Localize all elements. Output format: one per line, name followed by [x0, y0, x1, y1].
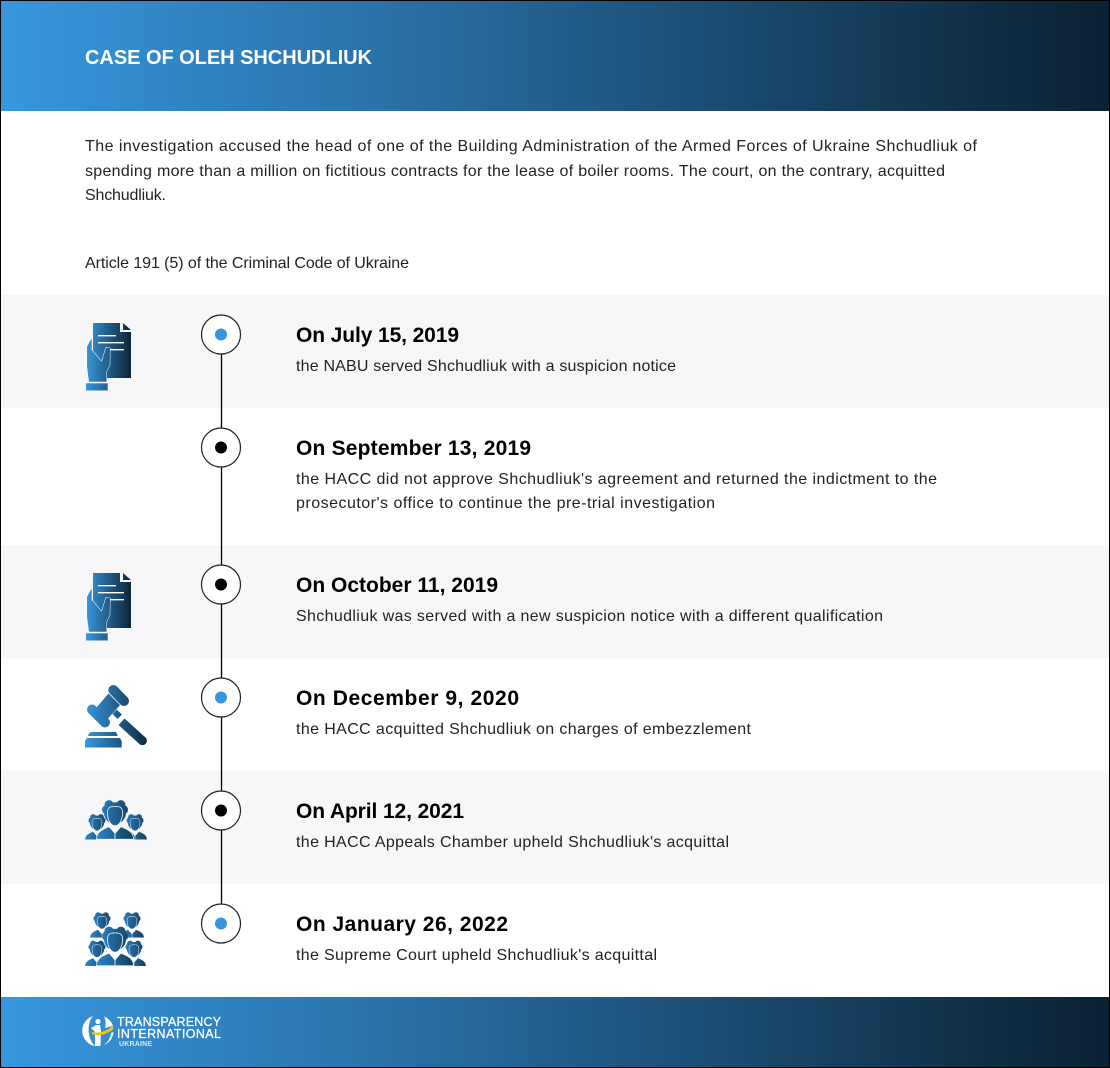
logo: Transparency International Ukraine: INTERNATIONAL: [117, 1027, 221, 1041]
event: December 9, 2020: the HACC acquitted Shchudliuk on charges of embezzlement: [296, 721, 752, 738]
timeline marker: July 15, 2019: [202, 315, 240, 354]
event: September 13, 2019: prosecutor's office to continue the pre-trial investigation: [296, 495, 715, 512]
event: October 11, 2019: On October 11, 2019: [296, 574, 498, 597]
row background bands: [0, 295, 1110, 884]
event: July 15, 2019: [296, 324, 676, 375]
timeline marker: April 12, 2021: [202, 791, 240, 830]
timeline marker: December 9, 2020: [202, 678, 240, 717]
icon: panel of three judges: [85, 800, 147, 840]
logo: Transparency International Ukraine: [82, 1015, 222, 1048]
event: December 9, 2020: On December 9, 2020: [296, 687, 519, 710]
timeline marker: September 13, 2019: [202, 428, 240, 467]
timeline marker: January 26, 2022: [202, 904, 240, 943]
footer banner: [0, 997, 1110, 1068]
event: April 12, 2021: On April 12, 2021: [296, 800, 464, 823]
event: January 26, 2022: On January 26, 2022: [296, 913, 508, 936]
intro paragraph: Shchudliuk.: [85, 187, 166, 204]
title: CASE OF OLEH SHCHUDLIUK: [85, 47, 373, 69]
event: September 13, 2019: the HACC did not approve Shchudliuk's agreement and returned the indictment to the: [296, 471, 937, 488]
intro paragraph: [85, 138, 978, 204]
event: October 11, 2019: Shchudliuk was served with a new suspicion notice with a different qualification: [296, 608, 883, 625]
header banner: [0, 0, 1110, 111]
event: April 12, 2021: the HACC Appeals Chamber upheld Shchudliuk's acquittal: [296, 834, 729, 851]
logo: Transparency International Ukraine: TRANSPARENCY: [117, 1015, 222, 1029]
event: December 9, 2020: [296, 687, 752, 738]
timeline marker: October 11, 2019: [202, 565, 240, 604]
event: July 15, 2019: the NABU served Shchudliuk with a suspicion notice: [296, 358, 676, 375]
event: September 13, 2019: [296, 437, 937, 512]
icon: hand holding document: [86, 573, 131, 640]
intro paragraph: The investigation accused the head of one of the Building Administration of the Armed Forces of Ukraine Shchudliuk of: [85, 138, 978, 155]
event: October 11, 2019: [296, 574, 883, 625]
legal article reference: Article 191 (5) of the Criminal Code of Ukraine: [85, 255, 409, 272]
event: September 13, 2019: On September 13, 2019: [296, 437, 531, 460]
timeline axis: [220, 334, 222, 923]
logo: Transparency International Ukraine: UKRAINE: [119, 1041, 152, 1048]
event: January 26, 2022: the Supreme Court upheld Shchudliuk's acquittal: [296, 947, 657, 964]
intro paragraph: spending more than a million on fictitious contracts for the lease of boiler rooms. The court, on the contrary, acquitted: [85, 163, 945, 180]
icon: hand holding document: [86, 323, 131, 390]
event: April 12, 2021: [296, 800, 729, 851]
icon: panel of five judges: [85, 912, 146, 966]
event: July 15, 2019: On July 15, 2019: [296, 324, 459, 347]
event: January 26, 2022: [296, 913, 657, 964]
icon: gavel: [85, 690, 147, 748]
